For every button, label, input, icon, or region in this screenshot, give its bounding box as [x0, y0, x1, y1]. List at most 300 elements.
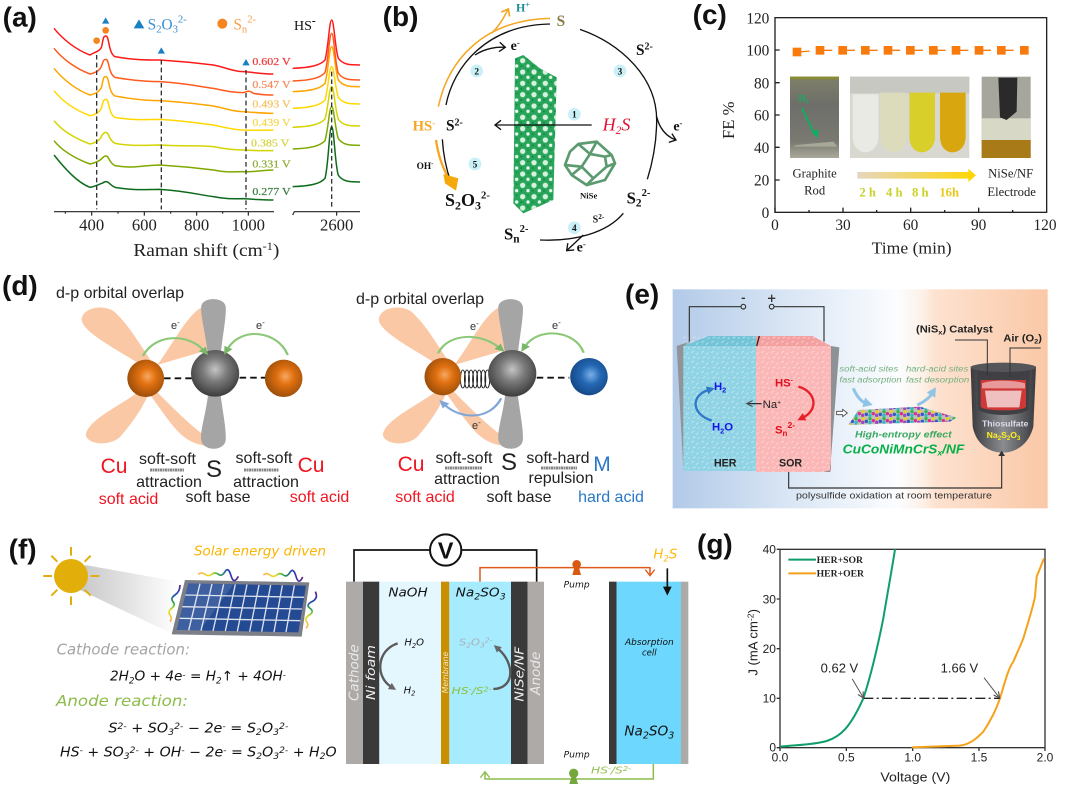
x tick labels: 90 — [971, 217, 987, 234]
panel: (e) HER-SOR electrolyzer — [625, 278, 1048, 508]
species labels: S — [627, 188, 636, 207]
axis titles: ) — [746, 609, 761, 613]
anode equation 1: + SO — [127, 721, 168, 736]
cell labels: H — [712, 422, 720, 434]
schematic labels: Na — [624, 725, 642, 740]
species labels: NiSe — [580, 190, 597, 200]
axis tick labels: 2600 — [320, 216, 353, 235]
species labels: - — [432, 118, 435, 128]
hollow arrow — [837, 409, 847, 417]
site labels: hard-acid sites — [906, 364, 968, 374]
orbital diagram: Cu-S-M — [379, 299, 608, 449]
y tick labels: 0 — [769, 741, 776, 755]
anode equation 1: 2- — [279, 722, 288, 732]
axis titles: -2 — [746, 613, 756, 621]
anode equation 2: O — [326, 745, 337, 760]
y tick labels: 60 — [754, 108, 770, 125]
electron labels right: - — [478, 418, 481, 427]
schematic labels: Pump — [564, 751, 590, 761]
schematic labels: 2- — [485, 636, 493, 644]
chart: Raman spectra left range — [54, 28, 273, 200]
icon: solar panel — [172, 580, 309, 637]
legend S2O3: 2 — [156, 25, 162, 36]
species labels: 2- — [645, 42, 653, 53]
y tick labels: 20 — [763, 642, 776, 656]
electron labels right: - — [476, 319, 479, 328]
photo captions: NiSe/NF — [988, 167, 1033, 181]
bonding labels left: S — [206, 456, 222, 483]
schematic labels: H — [404, 638, 412, 649]
species labels: 2- — [642, 188, 651, 199]
axis titles: Voltage (V) — [880, 770, 950, 785]
time labels: 8 h — [912, 186, 929, 200]
voltage labels: 0.602 V — [252, 56, 291, 68]
gradient background — [673, 289, 1048, 508]
voltage labels — [251, 56, 291, 198]
anode equation 2: O — [262, 745, 273, 760]
time labels: 4 h — [886, 186, 903, 200]
schematic labels: - — [608, 765, 612, 773]
callout 0.62 V — [821, 660, 863, 697]
anode equation 1: 2 — [256, 728, 262, 738]
cathode equation: 2 — [216, 676, 222, 686]
x tick labels: 0.5 — [838, 751, 855, 765]
axis tick labels: 1000 — [232, 216, 265, 235]
time labels: 16h — [939, 186, 959, 200]
heading (g): (g) — [697, 528, 733, 559]
x tick labels: 120 — [1033, 217, 1057, 234]
schematic labels: - — [469, 685, 472, 693]
legend Sn: 2- — [247, 15, 257, 26]
reference dashed lines — [97, 55, 332, 209]
electron labels right: e — [552, 320, 558, 332]
catalyst surface — [848, 407, 957, 425]
electron labels right: e — [472, 420, 478, 432]
label: d-p orbital overlap right: d-p orbital overlap — [356, 291, 484, 308]
cell labels: - — [791, 378, 793, 385]
schematic labels: 3 — [668, 730, 674, 741]
schematic labels: 2 — [466, 642, 471, 650]
NiSe cage icon — [565, 142, 615, 185]
anode equation 2: 3 — [273, 752, 279, 762]
bonding labels left: soft base — [186, 489, 251, 506]
bonding labels left: attraction — [136, 474, 202, 491]
step number badges — [469, 65, 626, 234]
vessel labels — [982, 418, 1029, 442]
site labels: fast adsorption — [839, 374, 902, 384]
cycle arrows — [436, 9, 676, 251]
panel: (f) flow cell schematic — [346, 534, 688, 784]
H2S inlet — [653, 547, 678, 596]
catalyst and air labels: Air (O — [1003, 333, 1031, 344]
time gradient arrow — [857, 169, 976, 182]
species labels: 2 — [636, 198, 642, 210]
schematic labels: 3 — [500, 592, 506, 602]
schematic labels: /S — [470, 686, 484, 697]
power wires and terminals — [689, 295, 824, 342]
H2S inlet: S — [669, 547, 678, 562]
bonding labels left: attraction — [233, 474, 299, 491]
chart: Raman spectra HS- peak — [293, 20, 360, 187]
catalyst and air labels: (NiS — [916, 324, 936, 335]
species labels: H — [516, 1, 525, 15]
photo captions: Graphite — [793, 167, 837, 181]
label: d-p orbital overlap left: d-p orbital overlap — [56, 285, 184, 302]
anode equation 2: - — [223, 746, 226, 756]
cell labels: n — [783, 429, 788, 438]
species labels: + — [525, 1, 530, 10]
schematic labels: 2 — [411, 690, 415, 698]
cathode equation: 2H — [110, 670, 129, 685]
electron labels left: - — [177, 318, 180, 327]
y tick labels: 120 — [746, 10, 770, 27]
schematic labels: Cathode — [347, 644, 362, 701]
feed lines — [955, 340, 1041, 377]
site labels: fast desorption — [906, 374, 970, 384]
light beam — [80, 565, 178, 633]
electron labels left: - — [262, 318, 265, 327]
Na+ migration: Na — [763, 399, 777, 411]
panel: (b) reaction cycle — [383, 1, 683, 256]
species labels: S — [636, 42, 645, 59]
plot frame with ticks — [777, 549, 1045, 751]
axis titles: FE % — [719, 101, 738, 139]
axis tick labels: 400 — [79, 216, 104, 235]
anode equation 1: = S — [226, 721, 256, 736]
electron labels right: - — [558, 318, 561, 327]
species labels: S — [504, 224, 513, 243]
curve: HER+SOR — [780, 549, 895, 747]
y tick labels: 10 — [763, 692, 776, 706]
species labels: S — [557, 13, 565, 30]
voltage labels: 0.547 V — [252, 79, 291, 91]
species labels: 3 — [475, 198, 481, 212]
axis with ticks — [54, 212, 360, 216]
species labels: e — [511, 39, 517, 54]
axis title: ) — [273, 240, 279, 261]
anode equation 2: 2 — [256, 752, 262, 762]
legend S2O3: 2- — [178, 15, 187, 26]
time labels: 2 h — [859, 186, 876, 200]
electron labels left — [171, 318, 265, 332]
NiSe crystal sheet — [513, 55, 557, 213]
species labels: S — [593, 214, 598, 225]
axis tick labels — [79, 216, 353, 235]
H2S label: S — [621, 115, 630, 135]
anode equation 1: 3 — [273, 728, 279, 738]
step number badges: 5 — [473, 160, 478, 170]
anode equation 2: - — [181, 746, 185, 756]
voltmeter circuit: V — [438, 537, 454, 563]
schematic labels: SO — [480, 585, 500, 600]
x tick labels — [772, 751, 1054, 765]
plot frame with ticks — [775, 18, 1047, 212]
high-entropy labels: /NF — [941, 442, 965, 456]
schematic labels: cell — [642, 648, 657, 658]
axis titles — [719, 101, 952, 257]
bonding labels right: soft acid — [395, 489, 455, 506]
reactor vessel — [971, 363, 1036, 453]
legend Sn: n — [242, 25, 248, 36]
species labels: - — [431, 161, 433, 168]
bonding labels right — [395, 449, 644, 506]
photo: NiSe/NF electrode — [982, 77, 1031, 158]
voltage labels: 0.331 V — [252, 158, 291, 170]
green flow line with pump — [485, 764, 653, 784]
cathode equation: 2 — [129, 676, 135, 686]
catalyst and air labels: ) — [1038, 333, 1042, 344]
high-entropy labels: High-entropy effect — [855, 429, 953, 439]
photo captions: Rod — [804, 184, 826, 198]
bonding labels right: M — [593, 453, 611, 476]
anode equation 2: + OH — [139, 745, 181, 760]
photo: solution tubes — [850, 77, 969, 158]
polysulfide return line — [789, 451, 1005, 501]
catalyst and air labels — [916, 324, 1042, 346]
axis title: Raman shift (cm — [133, 240, 253, 260]
y tick labels: 0 — [762, 205, 770, 222]
panel: (a) Raman spectra — [3, 2, 360, 261]
species labels: O — [461, 190, 475, 210]
schematic labels: 2 — [412, 642, 416, 650]
schematic labels: NaOH — [388, 585, 428, 600]
peak markers — [102, 17, 250, 65]
anode equation 2: HS — [60, 745, 78, 760]
axis tick labels: 800 — [184, 216, 209, 235]
bonding labels right: soft-hard — [526, 450, 590, 467]
y tick labels: 30 — [763, 592, 776, 606]
cell labels: 2 — [720, 426, 724, 435]
anode equation 1: 3 — [168, 728, 174, 738]
cell labels: H — [714, 381, 722, 393]
anode equation 2: - — [80, 746, 83, 756]
x tick labels: 0 — [771, 217, 779, 234]
x tick labels: 1.5 — [971, 751, 988, 765]
step number badges: 4 — [572, 224, 577, 234]
HS- label: HS — [294, 19, 312, 34]
bonding labels right: Cu — [398, 453, 424, 476]
half-reaction arrows — [696, 387, 813, 421]
electron labels left: e — [256, 320, 262, 332]
anode equation 2: 2- — [279, 746, 288, 756]
schematic labels: Na — [456, 585, 473, 600]
anode equation 2: + H — [288, 745, 320, 760]
schematic labels: O — [416, 638, 424, 649]
bonding labels left: soft acid — [290, 489, 349, 506]
cathode equation: ↑ + 4OH — [222, 670, 283, 685]
cell labels: O — [724, 422, 733, 434]
species labels: OH — [417, 162, 431, 172]
panel: (d) orbital overlap models — [2, 270, 644, 508]
species labels: 2- — [598, 212, 605, 221]
cell labels: 2 — [722, 386, 726, 395]
schematic labels: Ni foam — [363, 645, 378, 700]
electron labels right: e — [470, 321, 476, 333]
anode equation 1: 2- — [117, 722, 127, 732]
x tick labels: 2.0 — [1037, 751, 1054, 765]
anode equation 2: 3 — [124, 752, 130, 762]
x tick labels: 30 — [835, 217, 851, 234]
anode equation 1: - — [222, 722, 226, 732]
FE data series — [793, 46, 1029, 56]
bonding labels left: soft-soft — [236, 450, 293, 467]
high-entropy labels — [843, 429, 965, 457]
schematic labels: HS — [452, 686, 466, 697]
schematic labels: SO — [649, 725, 668, 740]
absorption cell layers — [609, 582, 688, 764]
bonding labels right: repulsion — [529, 470, 593, 487]
y tick labels — [763, 543, 776, 755]
H2S label: 2 — [616, 125, 622, 137]
bonding labels left: Cu — [101, 455, 127, 478]
catalyst and air labels: 2 — [1034, 339, 1039, 346]
bonding labels left: Cu — [298, 454, 324, 477]
voltage labels: 0.439 V — [252, 117, 291, 129]
cell labels — [712, 378, 802, 470]
species labels: 2- — [520, 224, 529, 235]
species labels: - — [517, 37, 520, 47]
bonding labels left: soft acid — [99, 491, 158, 508]
schematic labels: 3 — [480, 642, 485, 650]
cathode equation: - — [283, 670, 286, 680]
schematic labels: O — [471, 638, 480, 649]
site labels: soft-acid sites — [839, 364, 898, 374]
heading (d): (d) — [2, 270, 38, 301]
x tick labels: 0.0 — [772, 751, 789, 765]
species labels: - — [680, 118, 683, 128]
schematic labels: 2 — [643, 730, 649, 741]
species labels: S — [445, 190, 455, 210]
axis titles — [746, 609, 950, 785]
legend Sn: S — [233, 16, 242, 33]
species labels: e — [673, 120, 680, 135]
panel: (c) Faradaic efficiency — [693, 0, 1057, 257]
callout 1.66 V: 1.66 V — [941, 660, 979, 675]
bonding labels right: soft-soft — [436, 450, 493, 467]
schematic labels: H — [404, 685, 411, 696]
catalyst and air labels: ) Catalyst — [942, 324, 993, 335]
cathode equation: - — [182, 670, 186, 680]
schematic labels: Absorption — [624, 638, 674, 648]
electron labels left: e — [171, 320, 177, 332]
panel: (f) solar-driven reactions — [9, 533, 337, 762]
species labels: 2 — [455, 198, 461, 212]
species labels: n — [513, 234, 520, 246]
photo captions — [793, 167, 1036, 199]
species labels: S — [446, 118, 455, 135]
voltage labels: 0.385 V — [251, 138, 289, 150]
H2S inlet: 2 — [663, 554, 669, 564]
electrolysis cell layers — [346, 582, 544, 764]
cathode heading: Cathode reaction: — [57, 641, 190, 658]
panel: (g) polarization curves — [697, 528, 1054, 785]
conversion arrows — [380, 643, 510, 689]
thick orange arrow head — [443, 174, 458, 191]
species labels: - — [583, 239, 586, 249]
anode equation 2: = S — [226, 745, 257, 760]
heading (b): (b) — [383, 1, 418, 32]
Na+ migration — [748, 399, 781, 411]
cell labels: 2- — [787, 420, 795, 430]
anode equation 1: − 2e — [183, 721, 222, 736]
bonding labels right: hard acid — [578, 489, 644, 506]
species labels: HS — [413, 119, 432, 135]
adsorption arrows — [853, 388, 932, 405]
axis titles: J (mA cm — [746, 622, 761, 676]
H2S inlet: H — [653, 547, 663, 562]
catalyst and air labels: x — [938, 330, 943, 337]
schematic labels: NiSe/NF — [511, 646, 526, 702]
callout 1.66 V — [941, 660, 999, 697]
heading (f): (f) — [9, 533, 37, 564]
high-entropy labels: x — [936, 448, 943, 457]
y tick labels — [746, 10, 770, 222]
rainbow light waves — [169, 570, 316, 628]
anode equation 1: O — [262, 721, 273, 736]
orange flow line with pump — [480, 560, 650, 582]
cathode equation: = H — [186, 670, 216, 685]
photo: graphite rod: H — [798, 95, 806, 105]
solar label: Solar energy driven — [194, 545, 326, 560]
Na+ migration: + — [777, 400, 781, 407]
step number badges: 1 — [572, 111, 577, 121]
legend: HER+SOR — [817, 555, 864, 566]
bonding labels left: soft-soft — [139, 451, 197, 468]
schematic labels: 2 — [474, 592, 480, 602]
H2S label: H — [603, 115, 616, 135]
schematic labels — [347, 581, 674, 777]
legend S2O3: 3 — [173, 25, 178, 36]
cell labels: S — [775, 424, 783, 436]
voltage labels: 0.277 V — [252, 186, 291, 198]
axis tick labels: 600 — [132, 216, 157, 235]
bonding labels right: attraction — [434, 471, 500, 488]
species labels: 2- — [455, 117, 463, 128]
anode equation 1: 2- — [174, 722, 183, 732]
time labels — [859, 186, 959, 200]
legend Sn — [217, 15, 257, 36]
HS- label: - — [312, 16, 316, 28]
schematic labels: Anode — [529, 652, 544, 696]
bonding labels right: soft base — [487, 489, 552, 506]
voltage labels: 0.493 V — [252, 99, 291, 111]
schematic labels: HS — [591, 766, 605, 777]
legend S2O3: S — [148, 16, 156, 33]
cell labels: HS — [775, 378, 791, 390]
heading (e): (e) — [625, 278, 659, 309]
voltmeter circuit — [354, 534, 537, 582]
legend — [788, 555, 865, 580]
polysulfide return line: polysulfide oxidation at room temperature — [796, 491, 992, 501]
orbital diagram: Cu-S-Cu — [82, 299, 302, 449]
electron labels right — [470, 318, 561, 432]
legend S2O3 — [134, 15, 187, 36]
anode equation 2: + SO — [83, 745, 124, 760]
schematic labels: S — [459, 638, 465, 649]
anode equation 1: S — [108, 721, 117, 736]
electrolyzer cell — [677, 336, 839, 472]
y tick labels: 40 — [754, 140, 770, 157]
bonding labels right: S — [501, 449, 517, 476]
schematic labels: Pump — [564, 581, 590, 591]
callout 0.62 V: 0.62 V — [821, 660, 859, 675]
heading (a): (a) — [3, 2, 37, 33]
schematic labels: 2- — [623, 765, 632, 773]
sulfur markers — [93, 27, 109, 44]
cell labels: SOR — [779, 458, 802, 470]
axis title: -1 — [263, 241, 273, 253]
x tick labels — [771, 217, 1057, 234]
